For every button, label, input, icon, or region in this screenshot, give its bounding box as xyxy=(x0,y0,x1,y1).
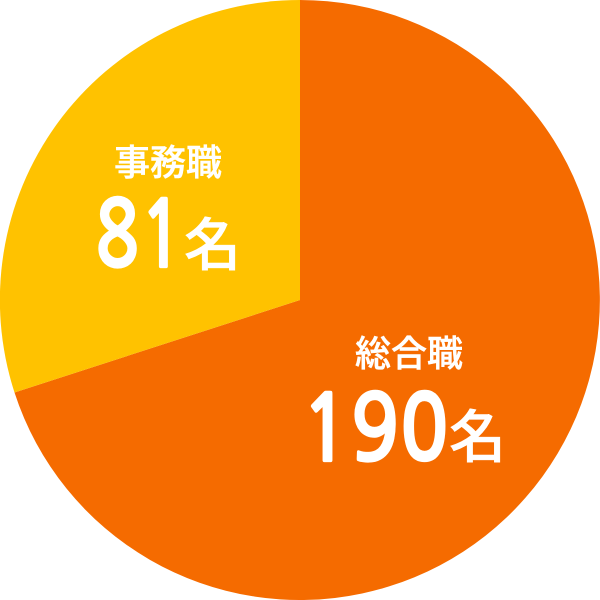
category: 事務職: 事務職 xyxy=(114,134,222,186)
count: 81: 81 xyxy=(95,190,184,281)
label: 総合職 190名 xyxy=(301,325,506,475)
unit: 名: 名 xyxy=(184,200,241,282)
category: 総合職: 総合職 xyxy=(355,325,463,377)
count: 190: 190 xyxy=(301,384,449,475)
slice: 事務職 81名 xyxy=(0,0,300,392)
label: 事務職 81名 xyxy=(95,134,241,282)
unit: 名: 名 xyxy=(449,392,506,474)
